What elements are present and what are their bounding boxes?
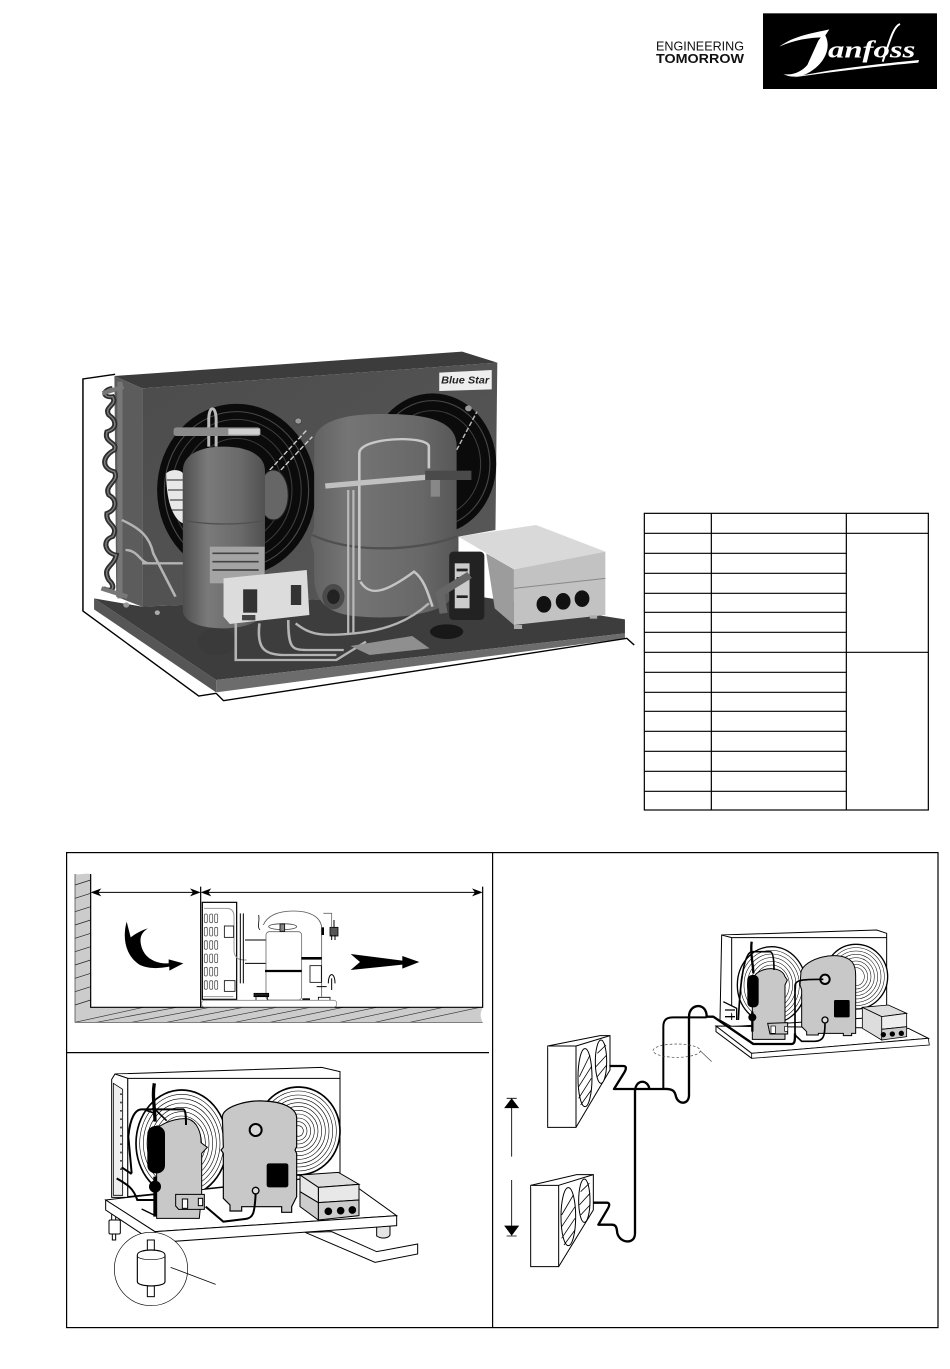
left mount [109, 1213, 120, 1240]
rail [305, 1232, 418, 1262]
base [106, 1175, 397, 1243]
receiver and compressor outline [157, 1119, 207, 1218]
receiver tank [174, 409, 265, 655]
dimension outline [83, 374, 634, 701]
compressor [310, 414, 471, 633]
terminal box [300, 1172, 359, 1220]
pressure switch [224, 570, 309, 624]
lower loop pipe [593, 1082, 649, 1241]
right fan [369, 393, 496, 535]
airflow straight arrow [351, 954, 419, 970]
right foot [377, 1225, 390, 1238]
unit side elevation [202, 902, 338, 1007]
copper pipes [122, 520, 429, 660]
condenser side with coil [101, 376, 142, 607]
upper evaporator [548, 1036, 610, 1127]
riser pipe [663, 1017, 707, 1089]
slogan: engineering tomorrow [656, 40, 744, 66]
lower evaporator [531, 1175, 593, 1267]
slogan: engineering tomorrow: ENGINEERING [656, 40, 744, 54]
base plate [94, 593, 625, 692]
airflow curved arrow [125, 922, 183, 971]
dimension arrows [91, 888, 483, 896]
detail: vibration damper [114, 1232, 216, 1306]
figure: evaporator height and pipe layout [505, 930, 929, 1267]
logo: Danfoss: anfoss [828, 37, 915, 63]
height dimension arrow [505, 1098, 518, 1236]
table grid [644, 513, 928, 810]
condensing unit [716, 930, 929, 1058]
data plate [350, 636, 430, 655]
terminal box [458, 525, 605, 629]
figure: anti-vibration mounting [106, 1067, 418, 1306]
fan grilles [136, 1087, 340, 1197]
motor wire [206, 1193, 256, 1222]
condenser top face [114, 352, 497, 388]
condenser front panel [142, 363, 497, 607]
wall and floor [75, 874, 483, 1022]
compressor [221, 1101, 297, 1212]
brand sticker: Blue Star [441, 375, 490, 386]
slogan: engineering tomorrow: TOMORROW [656, 52, 744, 66]
relay and capacitor block [430, 552, 484, 639]
panel frame: installation figures [67, 853, 938, 1328]
left fan [157, 404, 316, 576]
brand sticker [439, 370, 492, 391]
condenser back panel [112, 1067, 340, 1197]
switch [176, 1194, 204, 1209]
logo: Danfoss [763, 13, 937, 89]
suction pipe [609, 1006, 795, 1103]
accumulator and pipes [117, 1083, 186, 1217]
photo: condensing unit with outline [83, 352, 634, 701]
figure: clearance side view [75, 874, 483, 1022]
pipe insulation callout [653, 1044, 712, 1062]
